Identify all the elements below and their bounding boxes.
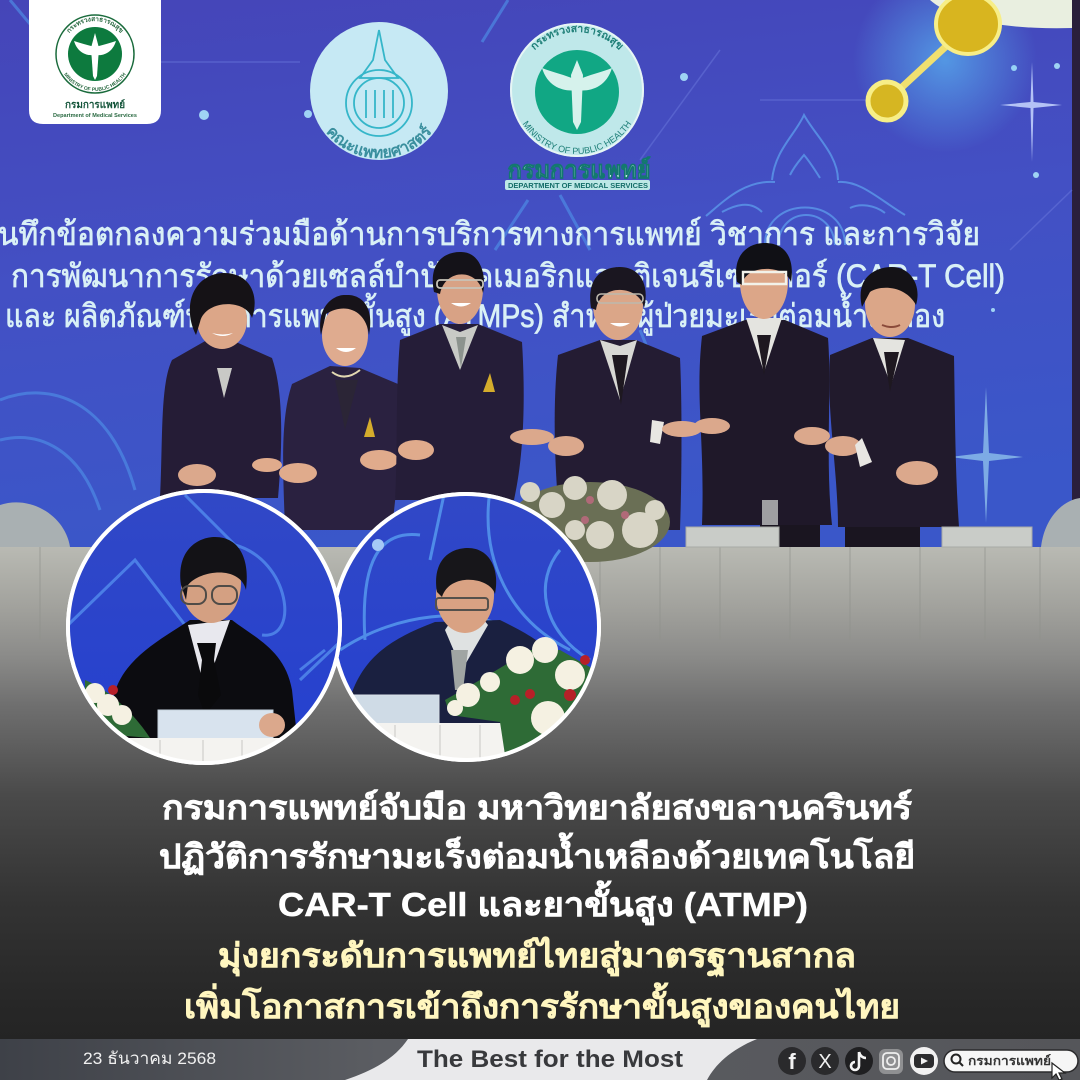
- headline: white title: [159, 789, 915, 926]
- person 6: man with black tie, hands clasped: [825, 267, 959, 547]
- icon: yellow molecule graphic: [853, 0, 1072, 152]
- headline: white title: ปฏิวัติการรักษามะเร็งต่อมน้ำเหลืองด้วยเทคโนโลยี: [159, 832, 915, 875]
- logo: ministry of public health seal on stage: กระทรวงสาธารณสุข: [532, 26, 623, 50]
- headline: white title: กรมการแพทย์จับมือ มหาวิทยาลัยสงขลานครินทร์: [162, 789, 912, 826]
- headline: yellow subtitle: เพิ่มโอกาสการเข้าถึงการรักษาขั้นสูงของคนไทย: [184, 982, 900, 1028]
- logo: ministry of public health seal on stage: [505, 23, 651, 190]
- headline: yellow subtitle: [184, 936, 900, 1028]
- logo card: department of medical services: [29, 0, 161, 124]
- person 3: man with glasses and gold badge: [395, 252, 554, 500]
- logo: faculty of medicine seal: [310, 22, 448, 160]
- flower arrangement on table: [510, 476, 670, 562]
- icon: facebook: f: [788, 1049, 796, 1074]
- search pill: [944, 1050, 1078, 1080]
- icon: sparkle star top right: [1000, 62, 1062, 162]
- logo card: department of medical services: MINISTRY OF PUBLIC HEALTH: [64, 72, 126, 91]
- logo: ministry of public health seal on stage: DEPARTMENT OF MEDICAL SERVICES: [508, 181, 648, 190]
- logo card: department of medical services: กระทรวงสาธารณสุข: [67, 17, 124, 33]
- footer band: [0, 1039, 1080, 1080]
- logo: faculty of medicine seal: คณะแพทยศาสตร์: [326, 122, 431, 158]
- icon: X: [811, 1047, 839, 1075]
- headline: white title: CAR-T Cell และยาขั้นสูง (ATMP): [278, 880, 808, 926]
- icon: facebook: [778, 1047, 806, 1075]
- headline: yellow subtitle: มุ่งยกระดับการแพทย์ไทยสู่มาตรฐานสากล: [218, 936, 856, 977]
- icon: X: X: [818, 1051, 832, 1073]
- person 4: man with glasses and black tie: [548, 267, 702, 530]
- logo card: department of medical services: Department of Medical Services: [53, 113, 137, 119]
- logo card: department of medical services: กรมการแพทย์: [65, 99, 125, 111]
- backdrop headline text: [0, 216, 1005, 336]
- backdrop headline text: และ ผลิตภัณฑ์ทางการแพทย์ขั้นสูง (ATMPs) สำหรับผู้ป่วยมะเร็งต่อมน้ำเหลือง: [5, 293, 945, 336]
- chairs behind table: [0, 498, 1080, 547]
- footer date: 23 ธันวาคม 2568: [83, 1049, 216, 1068]
- photo circle: left signer: [66, 489, 342, 773]
- backdrop headline text: นทึกข้อตกลงความร่วมมือด้านการบริการทางการแพทย์ วิชาการ และการวิจัย: [0, 216, 980, 252]
- icon: instagram: [879, 1049, 903, 1074]
- photo circle: right signer: [336, 492, 601, 762]
- stage backdrop: [0, 0, 1080, 560]
- person 2: woman in dark suit with badge: [252, 295, 401, 530]
- icon: tiktok: [845, 1047, 873, 1075]
- table with white drape and lower fade: [0, 527, 1080, 1042]
- person 5: tall man with white glasses: [694, 243, 832, 547]
- backdrop headline text: การพัฒนาการรักษาด้วยเซลล์บำบัดไคเมอริกแอนติเจนรีเซพเตอร์ (CAR-T Cell): [11, 258, 1005, 294]
- footer slogan: The Best for the Most: [417, 1046, 683, 1073]
- icon: sparkle star lower right: [950, 387, 1023, 523]
- logo: ministry of public health seal on stage: MINISTRY OF PUBLIC HEALTH: [522, 120, 632, 154]
- logo: ministry of public health seal on stage: กรมการแพทย์: [508, 156, 650, 184]
- icon: youtube: [910, 1047, 938, 1075]
- person 1: woman in dark suit: [160, 273, 281, 498]
- search pill: กรมการแพทย์: [968, 1054, 1051, 1068]
